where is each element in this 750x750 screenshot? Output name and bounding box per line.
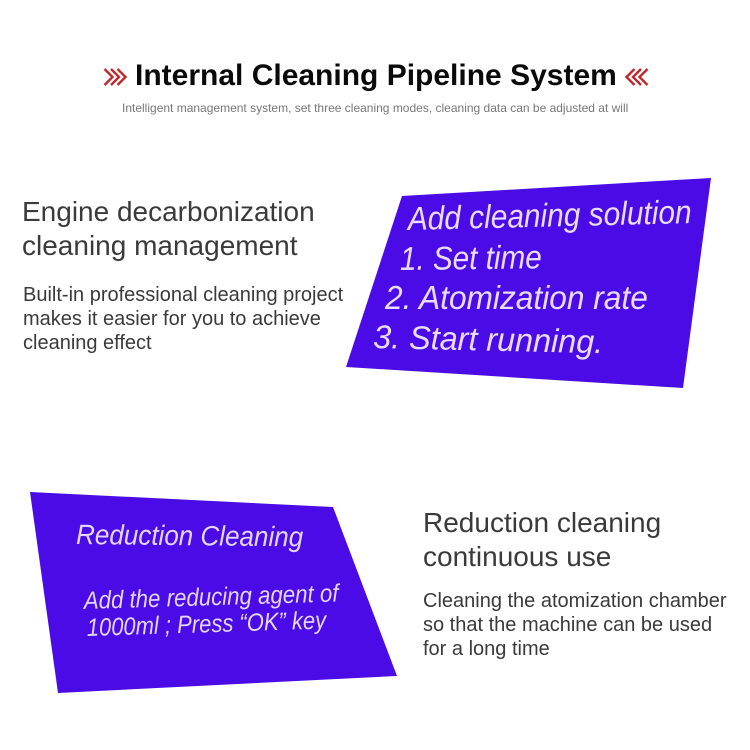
heading: engine decarbonization xyxy=(22,196,315,261)
panel: reduction cleaning screen: Reduction Cleaning xyxy=(76,519,303,553)
panel: add cleaning solution screen: 3. Start running. xyxy=(373,318,604,360)
text block: engine decarbonization xyxy=(23,284,344,354)
panel: add cleaning solution screen: Add cleaning solution xyxy=(405,194,692,237)
text block: engine decarbonization: cleaning effect xyxy=(23,332,152,354)
text block: reduction cleaning: for a long time xyxy=(423,638,550,660)
text block: engine decarbonization: Built-in professional cleaning project xyxy=(23,284,343,306)
panel: add cleaning solution screen: 2. Atomization rate xyxy=(384,279,648,316)
subtitle: Intelligent management system, set three cleaning modes, cleaning data can be adjusted at will xyxy=(122,101,628,115)
panel: reduction cleaning screen: Add the reducing agent of xyxy=(81,580,341,615)
text block: reduction cleaning xyxy=(423,590,727,660)
text block: reduction cleaning: Cleaning the atomization chamber xyxy=(423,590,727,612)
heading: engine decarbonization: Engine decarbonization xyxy=(22,196,315,227)
title: Internal Cleaning Pipeline System xyxy=(135,59,617,92)
heading: reduction cleaning xyxy=(423,507,661,572)
heading: reduction cleaning: continuous use xyxy=(423,541,611,572)
heading: engine decarbonization: cleaning management xyxy=(22,230,298,261)
panel: add cleaning solution screen: 1. Set time xyxy=(400,239,542,277)
text block: engine decarbonization: makes it easier for you to achieve xyxy=(23,308,321,330)
text block: reduction cleaning: so that the machine can be used xyxy=(423,614,712,636)
panel: reduction cleaning screen: 1000ml ; Press “OK” key xyxy=(86,606,328,641)
heading: reduction cleaning: Reduction cleaning xyxy=(423,507,661,538)
